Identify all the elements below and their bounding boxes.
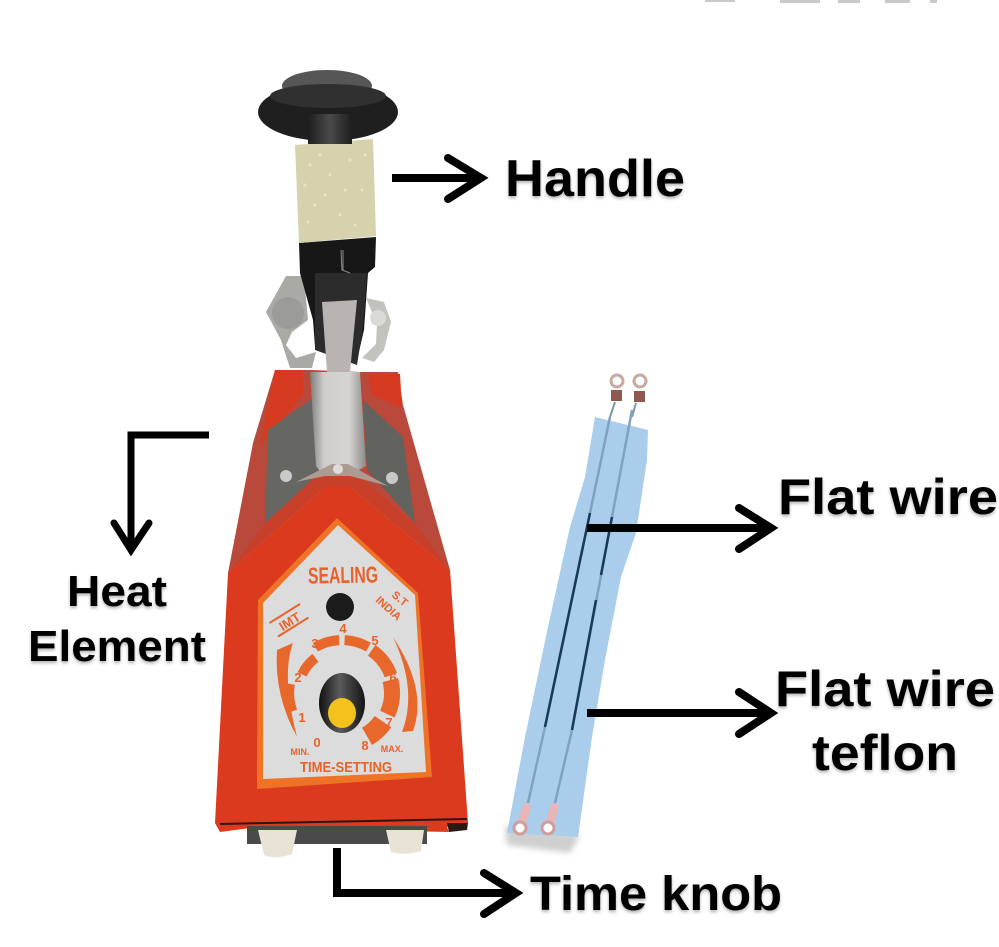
dial numerals: MIN. bbox=[290, 747, 310, 757]
dial numerals: TIME-SETTING bbox=[300, 759, 392, 776]
dial numerals: 8 bbox=[361, 738, 369, 753]
dial numerals: MAX. bbox=[381, 744, 403, 754]
pivot brackets bbox=[266, 276, 391, 368]
dial numerals bbox=[290, 621, 403, 776]
wires bbox=[528, 410, 632, 803]
time dial knob bbox=[319, 673, 365, 733]
plate text: IMT bbox=[269, 604, 309, 637]
steel centre column bbox=[310, 372, 366, 474]
dial numerals: 4 bbox=[339, 621, 347, 636]
label: Heat Element: Heat bbox=[67, 567, 167, 616]
arrow: handle bbox=[392, 158, 481, 199]
heating wire strip bbox=[505, 375, 648, 853]
terminals bottom bbox=[514, 803, 559, 834]
strip shadow bbox=[505, 825, 580, 853]
label: Time knob: Time knob bbox=[530, 868, 782, 921]
orange dial ring bbox=[270, 621, 414, 765]
metal side plates bbox=[265, 398, 415, 523]
plate text: IMT: IMT bbox=[276, 609, 303, 634]
dial numerals: 7 bbox=[385, 715, 393, 730]
black round knob bbox=[258, 70, 398, 144]
cropped marks at top edge bbox=[705, 0, 937, 3]
label: Flat wire teflon bbox=[775, 661, 995, 781]
arrow: flat wire teflon bbox=[587, 692, 771, 734]
arrow: heat element bbox=[114, 435, 209, 550]
dial numerals: 2 bbox=[294, 670, 302, 685]
rear body sides bbox=[228, 370, 450, 573]
bottom feet bbox=[247, 826, 427, 857]
plate text: ST India: INDIA bbox=[373, 594, 403, 623]
indicator lamp bbox=[326, 593, 354, 621]
dial numerals: 1 bbox=[298, 710, 306, 725]
handle grip beige bbox=[295, 139, 376, 243]
label: Flat wire: Flat wire bbox=[778, 469, 998, 525]
red roof strip bbox=[228, 472, 450, 573]
dial numerals: 5 bbox=[371, 633, 379, 648]
label: Flat wire teflon: Flat wire bbox=[775, 661, 995, 717]
plate text: ST India bbox=[373, 589, 410, 623]
impulse sealer machine bbox=[215, 70, 468, 857]
label: Heat Element bbox=[28, 567, 206, 671]
red front face bbox=[215, 487, 468, 832]
control plate bbox=[257, 518, 432, 789]
plate text: ST India: S.T bbox=[389, 589, 410, 609]
label: Handle: Handle bbox=[505, 150, 685, 208]
label: Heat Element: Element bbox=[28, 622, 206, 671]
arrow: time knob bbox=[337, 848, 516, 914]
dial numerals: 6 bbox=[389, 670, 397, 685]
terminals top bbox=[610, 375, 646, 417]
dial numerals: 3 bbox=[311, 636, 319, 651]
dial numerals: 0 bbox=[313, 735, 321, 750]
handle arm black bbox=[299, 237, 376, 360]
side arrows bbox=[277, 637, 418, 737]
blue teflon tape bbox=[507, 417, 648, 837]
arrow: flat wire bbox=[587, 508, 771, 549]
plate text: SEALING: SEALING bbox=[308, 561, 378, 589]
label: Flat wire teflon: teflon bbox=[812, 725, 958, 781]
